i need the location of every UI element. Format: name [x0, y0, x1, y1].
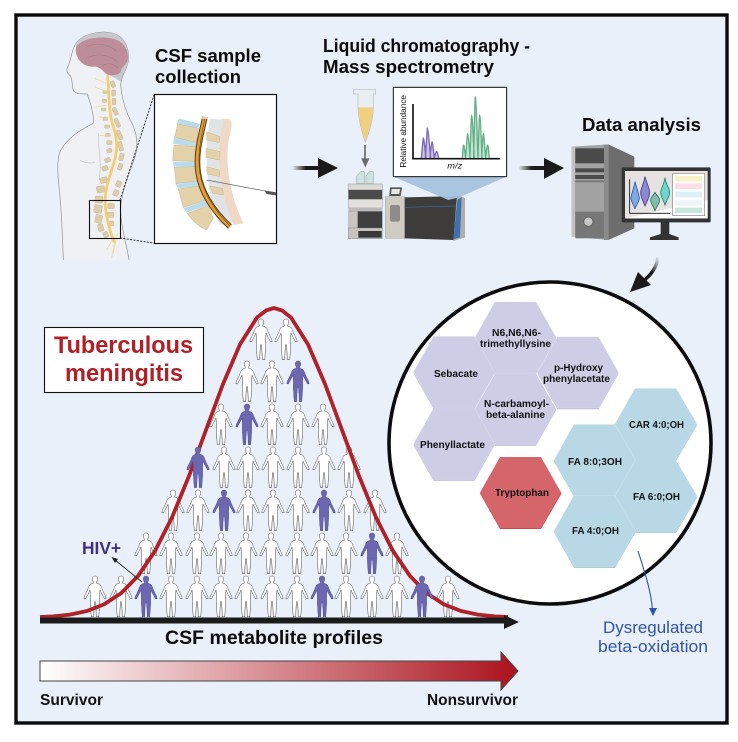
hexagon label: p-Hydroxy phenylacetate: phenylacetate [543, 374, 610, 385]
hexagon label: FA 6:0;OH: FA 6:0;OH [633, 492, 680, 503]
green peaks [462, 97, 489, 158]
illustration: LC-MS instrument [348, 87, 507, 241]
sample tube [353, 89, 375, 142]
gradient arrow: survivor to nonsurvivor [40, 652, 518, 690]
fade edges [173, 115, 237, 119]
cauda equina [197, 117, 230, 227]
hexagon label: N6,N6,N6-trimethyllysine: N6,N6,N6- [492, 328, 541, 339]
arm crease [80, 133, 100, 180]
projection beam [393, 177, 507, 200]
skull [75, 32, 129, 82]
chart: HIV positive people [135, 361, 433, 617]
hexagon label: p-Hydroxy phenylacetate: p-Hydroxy [554, 363, 603, 374]
arrow: chromatography to data analysis [518, 158, 564, 179]
title: Tuberculous meningitis [44, 328, 204, 392]
hexagon label: N-carbamoyl-beta-alanine: N-carbamoyl- [484, 399, 549, 410]
needle [207, 180, 267, 191]
hexagon label: N6,N6,N6-trimethyllysine [480, 328, 551, 350]
circle [389, 282, 711, 604]
heading: liquid chromatography mass spectrometry: Mass spectrometry [323, 56, 495, 77]
tower [608, 144, 634, 240]
panel: metabolite circle [389, 282, 711, 604]
heading: liquid chromatography mass spectrometry [323, 35, 530, 77]
callout: lumbar puncture zoom box [90, 94, 276, 244]
hexagon label: p-Hydroxy phenylacetate [543, 363, 610, 385]
illustration: computer with violin plots [572, 144, 711, 240]
label: HIV+: HIV+ [82, 538, 121, 558]
hexagon label: Phenyllactate: Phenyllactate [420, 440, 485, 451]
blue hexagons [554, 388, 697, 566]
hexagon label: FA 4:0;OH: FA 4:0;OH [572, 526, 619, 537]
down arrow [362, 145, 367, 159]
y axis label: Relative abundance [399, 94, 408, 168]
monitor stand [650, 222, 679, 240]
tryptophan hexagon [480, 458, 562, 529]
spinal cord and nerves [105, 76, 117, 242]
blue hexagon shadows [554, 390, 697, 568]
LC stack [348, 184, 382, 190]
illustration: human body with spine [58, 32, 137, 260]
arrow: data analysis to metabolite panel [630, 257, 658, 292]
label: dysregulated beta-oxidation [598, 619, 708, 656]
hexagon label: Sebacate: Sebacate [434, 369, 478, 380]
axis label: CSF metabolite profiles: CSF metabolite profiles [165, 627, 383, 649]
axis arrow [40, 615, 519, 629]
chart: people under the distribution [84, 319, 459, 617]
label: Survivor: Survivor [40, 692, 103, 709]
discs [173, 118, 208, 213]
title: Tuberculous meningitis: Tuberculous [54, 332, 193, 359]
brain [76, 37, 128, 75]
vertebrae [93, 81, 125, 238]
label: dysregulated beta-oxidation: beta-oxidation [598, 638, 708, 656]
lumbar marker box [90, 200, 120, 238]
MS body [385, 197, 405, 238]
heading: CSF sample collection [155, 45, 261, 87]
posterior tissue [207, 118, 233, 225]
hexagon label: Tryptophan: Tryptophan [495, 488, 549, 499]
legend table [673, 173, 705, 216]
arrow: dysregulated beta-oxidation pointer [638, 551, 657, 616]
hexagon label: CAR 4:0;OH: CAR 4:0;OH [629, 420, 684, 431]
spectrum panel [393, 87, 507, 177]
x axis label: m/z [447, 160, 463, 170]
hexagon label: FA 8:0;3OH: FA 8:0;3OH [568, 457, 622, 468]
hexagon label: N6,N6,N6-trimethyllysine: trimethyllysine [480, 339, 551, 350]
purple peaks [421, 128, 439, 158]
arrow: HIV+ pointer [112, 557, 142, 582]
label: Nonsurvivor: Nonsurvivor [427, 692, 518, 709]
vertebral bodies [173, 124, 223, 230]
label: dysregulated beta-oxidation: Dysregulated [603, 619, 703, 637]
hexagon label: N-carbamoyl-beta-alanine [484, 399, 549, 421]
LC bottles [357, 172, 373, 184]
purple hexagon shadows [414, 303, 618, 481]
hexagon label: N-carbamoyl-beta-alanine: beta-alanine [486, 410, 545, 421]
skin band [218, 118, 243, 225]
heading: CSF sample collection: CSF sample [155, 45, 261, 66]
spectrum axes [413, 104, 500, 159]
inset panel [154, 94, 276, 244]
violin axes [630, 179, 670, 213]
purple hexagons [414, 302, 618, 480]
monitor [622, 167, 711, 222]
title: Tuberculous meningitis: meningitis [65, 360, 183, 387]
heading: CSF sample collection: collection [155, 66, 241, 87]
violins [631, 182, 639, 209]
chart: distribution curve [40, 308, 508, 617]
heading: liquid chromatography mass spectrometry: Liquid chromatography - [323, 35, 530, 56]
body silhouette [58, 32, 137, 260]
dotted leader lines [120, 95, 154, 243]
arrow: sample to chromatography [292, 158, 338, 178]
heading: data analysis: Data analysis [582, 114, 701, 135]
